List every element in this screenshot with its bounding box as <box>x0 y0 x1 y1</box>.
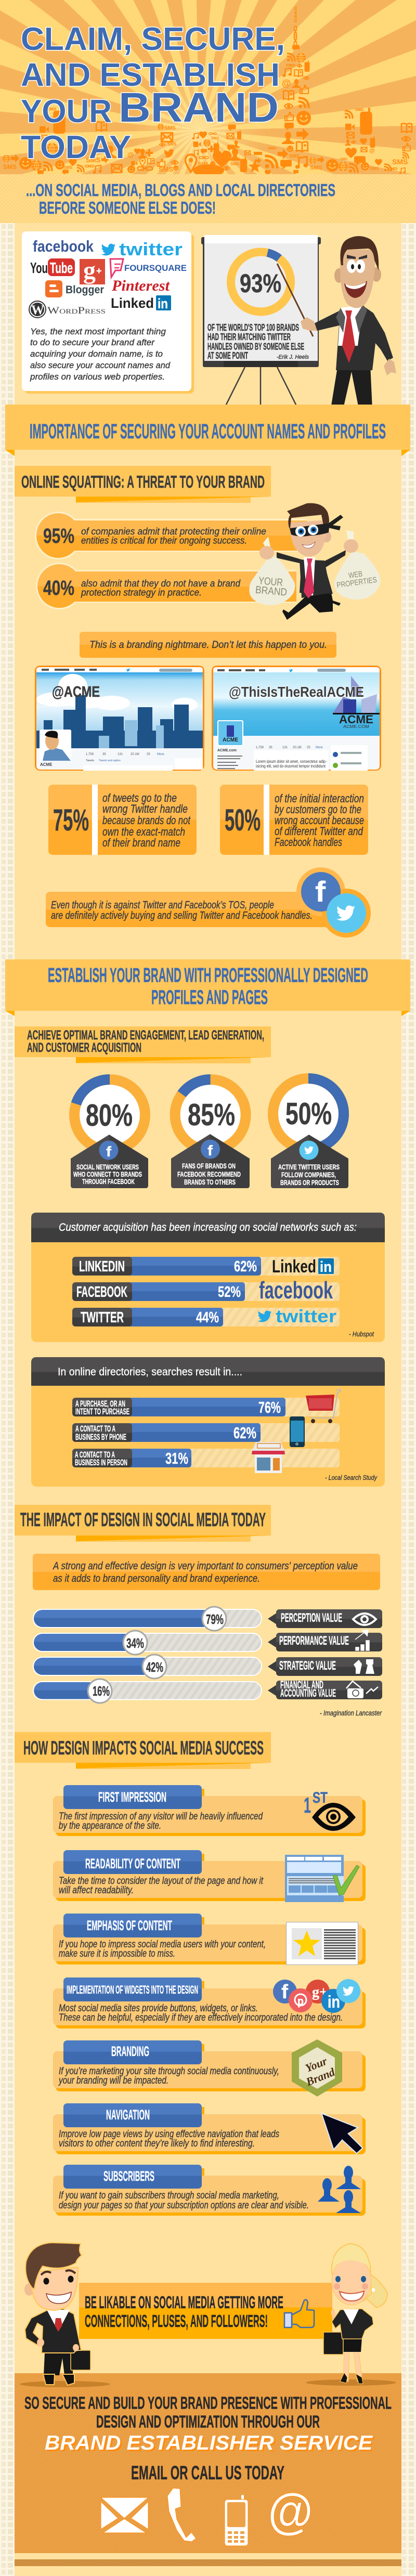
heading: achieve optimal brand engagement: AND CUSTOMER ACQUISITION <box>27 1040 141 1055</box>
progress bar: perception 79% <box>33 1607 262 1631</box>
donut: 85%: f <box>207 1142 213 1159</box>
donut: 85% <box>171 1079 250 1188</box>
bar: LinkedIn 62%: 62% <box>234 1258 257 1275</box>
shadow: ground under woman <box>306 2379 396 2386</box>
title: YOUR <box>21 94 112 129</box>
screenshot: @ThisIsTheRealACME twitter profile: ACME <box>223 737 238 743</box>
bar: purchase 76% <box>72 1398 340 1416</box>
bar: Facebook 52%: FACEBOOK <box>76 1284 127 1300</box>
icon: orange social media skyline: @ <box>127 151 134 159</box>
logo: linkedin: Linked <box>111 295 154 311</box>
card: implementation of widgets: IMPLEMENTATION OF WIDGETS INTO THE DESIGN <box>67 1983 198 1996</box>
panel: side pattern right <box>401 223 416 2576</box>
stat: 95%: 95% <box>43 525 74 548</box>
bar: in person 31%: 31% <box>165 1449 188 1467</box>
screenshot: @ThisIsTheRealACME twitter profile: 20.1M <box>293 746 302 749</box>
illustration: masked thief with bags: BRAND <box>255 584 288 599</box>
panel: flip chart 93%: -Erik J. Heels <box>277 354 309 360</box>
bar: Twitter 44%: 44% <box>196 1309 219 1326</box>
title: TODAY <box>21 129 131 165</box>
icon: shopping cart <box>306 1389 341 1423</box>
progress bar: financial 16% <box>33 1679 262 1703</box>
donut: 50% <box>271 1078 348 1188</box>
text: email or call us today: EMAIL OR CALL US TODAY <box>131 2462 284 2483</box>
donut: 85%: 85% <box>188 1098 235 1132</box>
progress bar: strategic 42%: 42% <box>146 1659 163 1675</box>
screenshot: @ACME twitter profile: @ACME <box>52 684 100 700</box>
screenshot: @ACME twitter profile: 1,759 <box>86 753 94 756</box>
heading: impact of design <box>15 1505 271 1542</box>
illustration: masked thief with bags: PROPERTIES <box>336 576 378 590</box>
donut: 50%: BRANDS OR PRODUCTS <box>280 1178 339 1187</box>
icon: orange social media skyline: SMS <box>198 161 209 166</box>
panel: bottom call to action <box>15 2373 401 2566</box>
card: subscribers: If you want to gain subscribers through social media marketing, <box>59 2190 279 2201</box>
icon: social media circles: p <box>297 1995 304 2008</box>
panel: flip chart 93%: HANDLES OWNED BY SOMEONE ELSE <box>207 341 304 352</box>
card: readability of content: will affect readability. <box>59 1885 134 1896</box>
logo: wordpress: WordPress <box>47 305 106 316</box>
label: financial and accounting value: ACCOUNTING VALUE <box>280 1687 336 1699</box>
illustration: businessman <box>24 2243 90 2385</box>
illustration: masked thief with bags: YOUR <box>258 575 283 589</box>
donut: 85%: FACEBOOK RECOMMEND <box>177 1170 241 1178</box>
icon: orange social media skyline: SMS <box>164 125 176 131</box>
bar: purchase 76%: A PURCHASE, OR AN <box>75 1399 125 1409</box>
stat box: 50% of initial interaction: by customers go to the <box>275 803 361 816</box>
stat box: 75% of tweets: because brands do not <box>102 814 191 827</box>
label: strategic value <box>268 1657 382 1676</box>
callout: branding nightmare <box>80 632 336 658</box>
title: CLAIM, SECURE, <box>21 21 285 57</box>
text: intro paragraph: Yes, the next most important thing <box>30 327 166 336</box>
heading: establish your brand <box>5 959 410 1016</box>
bar: phone 62%: 62% <box>233 1424 256 1442</box>
card: subscribers: SUBSCRIBERS <box>103 2168 154 2184</box>
icon: envelope <box>101 2497 148 2533</box>
shadow: ground under man <box>20 2381 110 2387</box>
icon: orange social media skyline: SMS <box>392 158 408 166</box>
logo: blogger <box>45 280 104 297</box>
icon: orange social media skyline: SMS <box>289 153 300 159</box>
icon: at sign: @ <box>268 2483 313 2539</box>
logo: foursquare <box>110 259 187 277</box>
screenshot: @ACME twitter profile: 35 <box>102 753 106 756</box>
donut: 50%: 50% <box>285 1097 332 1131</box>
icon: storefront <box>252 1442 285 1473</box>
stat box: 75% of tweets: own the exact-match <box>102 825 185 838</box>
bar: Facebook 52%: facebook <box>259 1277 333 1304</box>
donut: 80% <box>71 1079 148 1188</box>
bar: Twitter 44%: twitter <box>276 1307 336 1326</box>
stat box: 75% of tweets: of their brand name <box>102 836 180 849</box>
donut: 80%: 80% <box>86 1098 133 1133</box>
illustration: masked thief with bags <box>249 503 380 620</box>
logo: youtube <box>30 258 75 277</box>
stat: 95%: entities is critical for their ongoing success. <box>81 536 247 546</box>
screenshot: @ACME twitter profile: More <box>157 753 164 756</box>
stat: 95% <box>35 512 307 560</box>
screenshot: @ThisIsTheRealACME twitter profile: ACME <box>339 713 373 726</box>
panel: side pattern left <box>0 223 15 2576</box>
card: first impression: The first impression of any visitor will be heavily influenced <box>59 1811 263 1822</box>
label: financial and accounting value: FINANCIAL AND <box>280 1679 323 1691</box>
card: branding <box>53 2039 366 2097</box>
bar: in person 31%: BUSINESS IN PERSON <box>75 1458 127 1467</box>
shadow: ground under presenter <box>194 409 397 414</box>
logo: twitter <box>101 240 183 259</box>
stat: 95%: of companies admit that protecting their online <box>81 526 266 537</box>
screenshot: @ThisIsTheRealACME twitter profile: Lorem ipsum dolor sit amet, consectetur adip- <box>256 759 327 764</box>
stat: 40%: protection strategy in practice. <box>81 588 202 598</box>
icon: your brand badge: Your <box>303 2054 329 2075</box>
screenshot: @ThisIsTheRealACME twitter profile: ACME.com <box>217 749 237 752</box>
bar: purchase 76%: 76% <box>258 1398 281 1416</box>
screenshot: @ACME twitter profile <box>35 666 204 771</box>
callout: TOS with social icons: are definitely actively buying and selling Twitter and Facebook handles. <box>51 910 313 921</box>
donut: 85%: BRANDS TO OTHERS <box>184 1178 236 1186</box>
title <box>21 21 285 165</box>
illustration: masked thief with bags: WEB <box>348 569 363 580</box>
stat box: 50% of initial interaction: of different Twitter and <box>275 825 363 838</box>
icon: orange social media skyline <box>3 6 412 177</box>
label: financial and accounting value <box>268 1679 382 1699</box>
bar: phone 62% <box>72 1423 340 1442</box>
icon: three subscriber silhouettes <box>318 2166 361 2213</box>
icon: orange social media skyline: SMS <box>3 163 17 171</box>
progress bar: performance 34%: 34% <box>126 1635 144 1651</box>
screenshot: @ThisIsTheRealACME twitter profile <box>212 666 381 771</box>
progress bar: perception 79%: 79% <box>206 1611 224 1627</box>
callout: TOS with social icons <box>46 867 371 938</box>
logo: wordpress: W <box>31 303 44 317</box>
text: intro paragraph: profiles on various web properties. <box>30 372 165 382</box>
bar: Twitter 44%: TWITTER <box>81 1309 124 1326</box>
panel: social logos card <box>22 231 194 394</box>
screenshot: @ThisIsTheRealACME twitter profile: 35 <box>269 746 272 749</box>
card: emphasis of content: If you hope to impress social media users with your content, <box>59 1939 266 1950</box>
bar: phone 62%: A CONTACT TO A <box>75 1424 115 1434</box>
icon: orange social media skyline: SMS <box>167 142 177 147</box>
panel: flip chart 93% <box>201 235 321 411</box>
avatar <box>40 730 71 761</box>
card: implementation of widgets: Most social media sites provide buttons, widgets, or links. <box>59 2003 258 2014</box>
progress bar: strategic 42% <box>33 1655 262 1679</box>
screenshot: @ACME twitter profile: 131 <box>118 753 123 756</box>
callout: strong effective design: as it adds to brand personality and brand experience. <box>53 1573 260 1584</box>
icon: orange social media skyline: SMS <box>86 156 101 164</box>
label: perception value: PERCEPTION VALUE <box>281 1611 342 1625</box>
card: readability of content: Take the time to consider the layout of the page and how it <box>59 1876 264 1887</box>
card: navigation: visitors to other content they’re likely to find interesting. <box>59 2138 255 2149</box>
title: BRAND <box>119 84 279 131</box>
screenshot: @ThisIsTheRealACME twitter profile: @ThisIsTheRealACME <box>229 684 364 700</box>
card: first impression: FIRST IMPRESSION <box>98 1789 166 1805</box>
bar: purchase 76%: INTENT TO PURCHASE <box>75 1407 129 1416</box>
card: navigation: Improve low page views by using effective navigation that leads <box>59 2129 279 2140</box>
screenshot: @ThisIsTheRealACME twitter profile: More <box>316 746 323 749</box>
progress bar: performance 34% <box>33 1631 262 1655</box>
icon: orange social media skyline: SMS <box>310 165 322 171</box>
screenshot: @ACME twitter profile: Tweets <box>86 759 94 762</box>
bar: Facebook 52%: 52% <box>218 1284 241 1300</box>
donut: 50%: FOLLOW COMPANIES, <box>281 1170 336 1179</box>
bar: in person 31%: A CONTACT TO A <box>75 1450 115 1460</box>
stat box: 75% of tweets <box>48 785 197 855</box>
card: first impression <box>53 1785 366 1836</box>
icon: 1st eye: ST <box>313 1789 328 1806</box>
bar: Facebook 52% <box>72 1277 340 1304</box>
icon: mouse cursor <box>322 2114 362 2153</box>
donut: 80%: SOCIAL NETWORK USERS <box>76 1163 139 1171</box>
stat box: 75% of tweets: of tweets go to the <box>102 791 177 804</box>
illustration: presenter with pointer <box>277 236 396 411</box>
icon: 1st eye <box>304 1789 356 1831</box>
heading: online squatting <box>15 466 271 503</box>
source: Hubspot: - Hubspot <box>349 1330 374 1338</box>
text: brand establisher service: BRAND ESTABLISHER SERVICE <box>45 2432 373 2454</box>
logo: youtube: Tube <box>50 260 73 277</box>
icon: orange social media skyline: SMS <box>230 162 240 166</box>
card: readability of content <box>53 1850 366 1902</box>
bar: phone 62%: BUSINESS BY PHONE <box>75 1432 126 1442</box>
panel: flip chart 93%: AT SOME POINT <box>207 350 248 361</box>
label: perception value <box>268 1609 382 1628</box>
text: intro paragraph: to do to secure your brand after <box>30 338 155 347</box>
icon: your brand badge: Brand <box>304 2065 337 2089</box>
card: readability of content: READABILITY OF CONTENT <box>85 1856 180 1871</box>
stat box: 50% of initial interaction <box>220 785 368 855</box>
source: imagination lancaster: - Imagination Lancaster <box>320 1709 382 1717</box>
screenshot: @ThisIsTheRealACME twitter profile: 25 <box>307 746 310 749</box>
bar: in person 31% <box>72 1449 340 1467</box>
bar: LinkedIn 62%: LINKEDIN <box>79 1258 125 1275</box>
card: first impression: by the appearance of the site. <box>59 1820 161 1831</box>
panel: customer acquisition bars: Customer acquisition has been increasing on social networks such as: <box>59 1221 357 1233</box>
logo: google plus <box>80 257 105 284</box>
source: local search study: - Local Search Study <box>325 1474 378 1481</box>
logo: twitter: twitter <box>119 240 183 259</box>
text: intro paragraph: acquiring your domain name, is to <box>30 349 163 359</box>
panel: customer acquisition bars <box>31 1213 385 1342</box>
panel: be likable banner <box>79 2283 332 2339</box>
stat box: 75% of tweets: wrong Twitter handle <box>102 802 188 815</box>
panel: subheading band <box>0 174 416 223</box>
panel: flip chart 93%: OF THE WORLD'S TOP 100 BRANDS <box>207 322 299 333</box>
screenshot: @ACME twitter profile: 25 <box>147 753 150 756</box>
callout: branding nightmare: This is a branding nightmare. Don’t let this happen to you. <box>89 640 327 650</box>
card: subscribers: design your pages so that your subscription options are clear and visible. <box>59 2200 309 2211</box>
card: emphasis of content: make sure it is impossible to miss. <box>59 1948 175 1959</box>
card: navigation: NAVIGATION <box>106 2107 150 2123</box>
panel: online directories bars <box>31 1357 385 1487</box>
stat box: 50% of initial interaction: of the initial interaction <box>275 792 364 805</box>
label: performance value <box>268 1630 382 1651</box>
card: emphasis of content: EMPHASIS OF CONTENT <box>87 1918 172 1933</box>
logo: google plus: + <box>96 266 102 276</box>
panel: flip chart 93%: HAD THEIR MATCHING TWITTER <box>207 332 291 342</box>
card: navigation <box>53 2103 366 2154</box>
heading: importance of securing <box>5 405 410 456</box>
stat box: 50% of initial interaction: 50% <box>225 803 261 837</box>
heading: achieve optimal brand engagement <box>15 1026 271 1063</box>
callout: strong effective design: A strong and effective design is very important to consumers' perception value <box>53 1560 358 1572</box>
icon: thumbs up <box>284 2300 314 2327</box>
logo: facebook: facebook <box>33 237 94 255</box>
icon: content panel with star <box>286 1922 358 1964</box>
donut: 80%: THROUGH FACEBOOK <box>82 1177 135 1186</box>
icon: mobile phone <box>225 2495 248 2546</box>
panel: subheading band: BEFORE SOMEONE ELSE DOES! <box>39 198 216 217</box>
card: subscribers <box>53 2165 366 2216</box>
icon: orange social media skyline: SMS <box>159 165 174 173</box>
logo: wordpress <box>29 301 106 318</box>
stat box: 75% of tweets: 75% <box>53 803 89 837</box>
icon: layout with check <box>285 1855 359 1902</box>
logo: youtube: You <box>30 260 48 277</box>
icon: social media circles: in <box>328 1992 340 2011</box>
stat: 40%: 40% <box>43 577 74 600</box>
label: strategic value: STRATEGIC VALUE <box>279 1659 336 1673</box>
screenshot: @ThisIsTheRealACME twitter profile: 131 <box>282 746 288 749</box>
bar: LinkedIn 62% <box>72 1257 340 1277</box>
heading: establish your brand: PROFILES AND PAGES <box>151 986 268 1009</box>
screenshot: @ThisIsTheRealACME twitter profile: ACME.COM <box>343 724 369 729</box>
illustration: businesswoman <box>323 2244 387 2384</box>
icon: 1st eye: 1 <box>304 1793 311 1817</box>
stat box: 50% of initial interaction: wrong account because <box>275 814 364 827</box>
icon: smartphone <box>290 1416 305 1447</box>
icon: telephone handset <box>167 2488 196 2542</box>
screenshot: @ThisIsTheRealACME twitter profile: 1,759 <box>256 746 264 749</box>
stat: 40%: also admit that they do not have a brand <box>81 578 241 589</box>
logo: linkedin: in <box>158 296 168 311</box>
bar: LinkedIn 62%: Linked <box>272 1257 316 1277</box>
icon: orange social media skyline: SMS <box>370 166 379 171</box>
logo: pinterest: Pinterest <box>111 277 171 294</box>
progress bar: financial 16%: 16% <box>93 1683 110 1699</box>
icon: orange social media skyline: SMS <box>294 6 298 23</box>
logo: blogger: Blogger <box>66 284 104 296</box>
donut: 80%: f <box>106 1143 112 1160</box>
icon: social media circles <box>273 1979 360 2013</box>
donut: 85%: FANS OF BRANDS ON <box>182 1162 236 1170</box>
card: implementation of widgets: These can be helpful, especially if they are effectively incorporated into the design. <box>59 2012 343 2023</box>
callout: strong effective design <box>33 1554 380 1590</box>
stat box: 50% of initial interaction: Facebook handles <box>275 836 342 849</box>
icon: orange social media skyline: SMS <box>63 165 73 170</box>
icon: orange social media skyline: SMS <box>211 137 219 140</box>
heading: how design impacts <box>15 1732 271 1769</box>
title: AND ESTABLISH <box>21 57 280 93</box>
screenshot: @ACME twitter profile: 20.1M <box>131 753 139 756</box>
donut: 50%: ACTIVE TWITTER USERS <box>278 1163 340 1171</box>
icon: your brand badge <box>292 2039 342 2097</box>
donut: 80%: WHO CONNECT TO BRANDS <box>73 1170 142 1178</box>
logo: google plus: g <box>83 257 96 284</box>
callout: TOS with social icons: Even though it is against Twitter and Facebook’s TOS, people <box>51 900 274 911</box>
stat: 40% <box>36 563 296 609</box>
screenshot: @ThisIsTheRealACME twitter profile: isicing elit, sed do eiusmod tempor incididunt <box>256 764 326 769</box>
bar: LinkedIn 62%: in <box>320 1259 332 1276</box>
card: branding: BRANDING <box>111 2044 149 2059</box>
bar: Twitter 44% <box>72 1307 340 1326</box>
icon: social media circles: f <box>281 1981 288 2003</box>
card: branding: your branding will be impacted. <box>58 2075 168 2086</box>
panel: online directories bars: In online directories, searches result in.... <box>58 1366 242 1378</box>
clouds <box>36 674 198 711</box>
card: emphasis of content <box>53 1914 366 1964</box>
icon: orange social media skyline: @ <box>282 78 291 88</box>
callout: TOS with social icons: f <box>315 875 326 908</box>
card: implementation of widgets <box>53 1977 366 2028</box>
panel: flip chart 93%: 93% <box>240 269 281 298</box>
logo: foursquare: FOURSQUARE <box>124 263 187 273</box>
card: branding: If you’re marketing your site through social media continuously, <box>59 2066 279 2077</box>
city skyline <box>36 695 203 748</box>
text: intro paragraph <box>30 327 171 382</box>
icon: orange social media skyline: @ <box>369 148 375 154</box>
screenshot: @ACME twitter profile: ACME <box>40 762 53 767</box>
screenshot: @ACME twitter profile: Tweets and replies <box>99 759 121 762</box>
text: intro paragraph: also secure your account names and <box>30 361 171 370</box>
icon: social media circles: g+ <box>312 1984 328 2000</box>
